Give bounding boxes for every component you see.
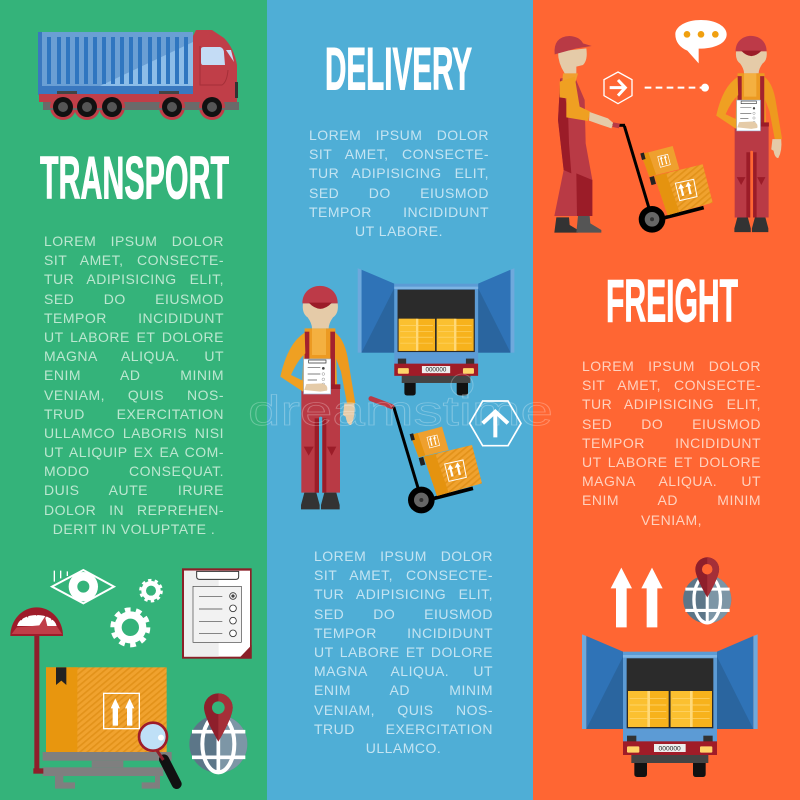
text block: transport: VENIAM, QUIS NOS- xyxy=(44,386,224,402)
delivery illustrations and heading xyxy=(280,36,522,514)
text block: transport: TRUD EXERCITATION xyxy=(44,406,224,422)
text block: delivery top: SED DO EIUSMOD xyxy=(309,185,489,201)
panel: transport xyxy=(0,0,267,800)
icon: container truck xyxy=(38,30,239,120)
icon: parcel on scale xyxy=(10,607,177,789)
open back truck xyxy=(358,268,514,395)
text block: transport: MODO CONSEQUAT. xyxy=(44,463,224,479)
open back truck: 000000 xyxy=(659,745,681,752)
watermark: dreamstime xyxy=(248,387,553,434)
bottom left icon group xyxy=(10,568,252,789)
worker holding clipboard xyxy=(280,286,355,509)
text block: transport xyxy=(44,233,224,537)
text block: delivery bottom: ENIM AD MINIM xyxy=(314,682,493,698)
text block: delivery bottom: VENIAM, QUIS NOS- xyxy=(314,702,493,718)
text block: delivery bottom: TEMPOR INCIDIDUNT xyxy=(314,625,493,641)
text block: freight xyxy=(582,358,761,528)
open back truck xyxy=(582,634,758,777)
text block: transport: TUR ADIPISICING ELIT, xyxy=(44,271,224,287)
open back truck: 000000 xyxy=(425,366,447,373)
text block: transport: UT LABORE ET DOLORE xyxy=(44,329,224,345)
text block: freight: LOREM IPSUM DOLOR xyxy=(582,358,761,374)
text block: transport: ULLAMCO LABORIS NISI xyxy=(44,425,224,441)
transport illustrations and heading xyxy=(10,30,252,789)
text block: delivery bottom: SED DO EIUSMOD xyxy=(314,606,493,622)
icon: hexagon right arrow with dashed line xyxy=(604,72,709,104)
worker holding clipboard xyxy=(716,36,782,232)
text block: delivery top xyxy=(309,127,489,239)
icon: globe with pin xyxy=(189,693,247,773)
text block: transport: DOLOR IN REPREHEN- xyxy=(44,502,224,518)
text block: freight: MAGNA ALIQUA. UT xyxy=(582,473,761,489)
text block: transport: DERIT IN VOLUPTATE . xyxy=(53,521,215,537)
text block: delivery top: TUR ADIPISICING ELIT, xyxy=(309,165,489,181)
text block: delivery bottom: TUR ADIPISICING ELIT, xyxy=(314,586,493,602)
text block: delivery bottom: UT LABORE ET DOLORE xyxy=(314,644,493,660)
text block: transport: UT ALIQUIP EX EA COM- xyxy=(44,444,224,460)
text block: delivery bottom: MAGNA ALIQUA. UT xyxy=(314,663,493,679)
icon: clipboard checklist xyxy=(182,568,252,659)
text block: freight: TEMPOR INCIDIDUNT xyxy=(582,435,761,451)
text block: freight: ENIM AD MINIM xyxy=(582,492,761,508)
icon: gears xyxy=(113,580,161,645)
text block: transport: ENIM AD MINIM xyxy=(44,367,224,383)
text block: delivery top: LOREM IPSUM DOLOR xyxy=(309,127,489,143)
text block: freight: VENIAM, xyxy=(641,512,702,528)
panel: freight xyxy=(533,0,800,800)
freight illustrations and heading xyxy=(554,20,782,777)
text block: transport: SIT AMET, CONSECTE- xyxy=(44,252,224,268)
icon: eye xyxy=(52,570,114,603)
text block: transport: LOREM IPSUM DOLOR xyxy=(44,233,224,249)
text block: freight: TUR ADIPISICING ELIT, xyxy=(582,396,761,412)
text block: delivery bottom xyxy=(314,548,493,756)
text block: transport: DUIS AUTE IRURE xyxy=(44,482,224,498)
panel: delivery xyxy=(267,0,533,800)
text block: transport: SED DO EIUSMOD xyxy=(44,291,224,307)
text block: delivery top: UT LABORE. xyxy=(355,223,443,239)
text block: freight: UT LABORE ET DOLORE xyxy=(582,454,761,470)
text block: freight: SIT AMET, CONSECTE- xyxy=(582,377,761,393)
text block: transport: TEMPOR INCIDIDUNT xyxy=(44,310,224,326)
text block: freight: SED DO EIUSMOD xyxy=(582,416,761,432)
hand trolley with boxes xyxy=(613,125,713,233)
icon: speech bubble xyxy=(675,20,727,63)
hand trolley with boxes xyxy=(371,399,482,513)
icon: hexagon up arrow xyxy=(470,401,521,446)
text block: delivery top: SIT AMET, CONSECTE- xyxy=(309,146,489,162)
text block: delivery bottom: LOREM IPSUM DOLOR xyxy=(314,548,493,564)
text block: delivery bottom: TRUD EXERCITATION xyxy=(314,721,493,737)
icon: globe with pin xyxy=(683,557,731,623)
text block: delivery bottom: ULLAMCO. xyxy=(366,740,441,756)
text block: transport: MAGNA ALIQUA. UT xyxy=(44,348,224,364)
text block: delivery bottom: SIT AMET, CONSECTE- xyxy=(314,567,493,583)
worker pushing trolley, side view xyxy=(554,36,614,233)
icon: two up arrows xyxy=(611,568,663,627)
text block: delivery top: TEMPOR INCIDIDUNT xyxy=(309,204,489,220)
